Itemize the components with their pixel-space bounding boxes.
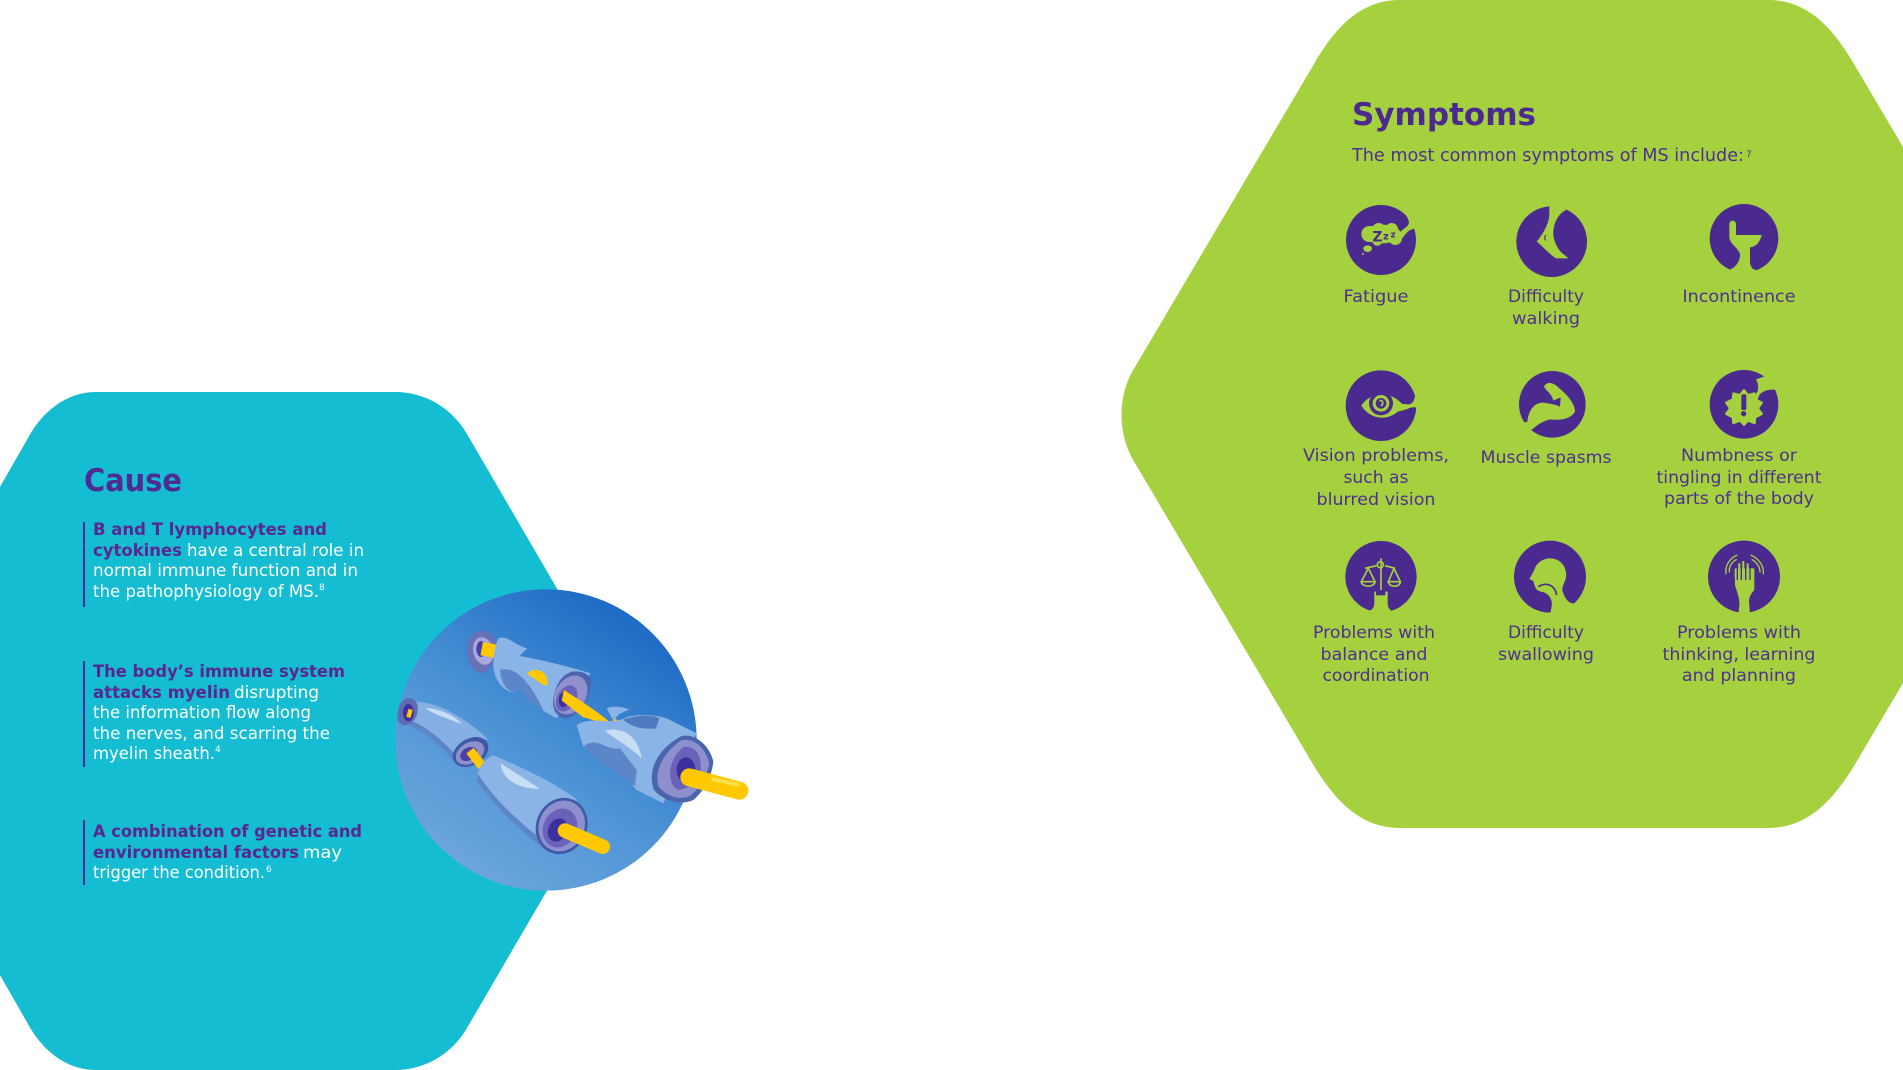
label: vision problems: blurred vision bbox=[1316, 490, 1436, 509]
icon: swallowing bbox=[1514, 541, 1586, 615]
icon: fatigue bbox=[1346, 205, 1423, 275]
text block: genetic factors: environmental factors bbox=[93, 843, 299, 862]
icon: thinking bbox=[1708, 541, 1780, 615]
label: balance bbox=[1313, 623, 1435, 685]
text block: immune system bbox=[83, 661, 345, 767]
label: muscle spasms: Muscle spasms bbox=[1480, 448, 1612, 467]
icon: balance bbox=[1345, 541, 1417, 618]
label: thinking bbox=[1662, 623, 1816, 685]
small upper cap bbox=[467, 631, 496, 673]
label: vision problems bbox=[1303, 446, 1449, 509]
text block: genetic factors: 6 bbox=[266, 865, 272, 875]
tube A bbox=[408, 702, 487, 765]
text block: lymphocytes: cytokines bbox=[93, 541, 182, 560]
heading: cause: Cause bbox=[84, 463, 182, 499]
panel: symptoms hexagon bbox=[1122, 0, 1903, 828]
icon: vision bbox=[1346, 370, 1422, 441]
label: numbness: tingling in different bbox=[1656, 468, 1822, 487]
label: balance: Problems with bbox=[1313, 623, 1435, 642]
text block: lymphocytes: the pathophysiology of MS. bbox=[93, 582, 319, 601]
label: thinking: thinking, learning bbox=[1662, 645, 1816, 664]
label: difficulty walking: walking bbox=[1512, 309, 1580, 328]
heading: symptoms: Symptoms bbox=[1352, 97, 1536, 133]
tube B bbox=[476, 755, 577, 854]
text block: lymphocytes: B and T lymphocytes and bbox=[93, 520, 327, 539]
label: thinking: and planning bbox=[1682, 666, 1796, 685]
text block: lymphocytes: normal immune function and in bbox=[93, 561, 358, 580]
icon: walking bbox=[1516, 203, 1587, 277]
label: difficulty walking: Difficulty bbox=[1508, 287, 1584, 306]
text block: genetic factors: trigger the condition. bbox=[93, 863, 265, 882]
label: vision problems: Vision problems, bbox=[1303, 446, 1449, 465]
label: vision problems: such as bbox=[1344, 468, 1408, 487]
label: thinking: Problems with bbox=[1677, 623, 1801, 642]
subtitle: The most common symptoms of MS include: bbox=[1351, 146, 1744, 166]
label: balance: coordination bbox=[1322, 666, 1430, 685]
cap of tube A bbox=[448, 731, 494, 773]
icon: numbness bbox=[1710, 370, 1779, 439]
label: incontinence: Incontinence bbox=[1682, 287, 1796, 306]
text block: lymphocytes: have a central role in bbox=[187, 541, 364, 560]
icon: fatigue: Z bbox=[1372, 229, 1382, 245]
illustration: damaged nerve fibres bbox=[393, 589, 739, 891]
label: difficulty swallowing: swallowing bbox=[1498, 645, 1594, 664]
label: fatigue: Fatigue bbox=[1344, 287, 1408, 306]
label: balance: balance and bbox=[1320, 645, 1428, 664]
text block: immune system: 4 bbox=[215, 745, 221, 755]
icon: muscle bbox=[1517, 371, 1586, 440]
text block: immune system: disrupting bbox=[234, 683, 319, 702]
icon: fatigue: z bbox=[1391, 231, 1396, 241]
subtitle: 7 bbox=[1746, 150, 1752, 160]
panel: cause hexagon bbox=[0, 392, 640, 1070]
text block: immune system: the information flow along bbox=[93, 703, 311, 722]
text block: immune system: attacks myelin bbox=[93, 683, 230, 702]
label: numbness: Numbness or bbox=[1681, 446, 1797, 465]
text block: lymphocytes: 8 bbox=[319, 583, 325, 593]
label: numbness bbox=[1656, 446, 1822, 508]
torn tube bbox=[493, 638, 591, 718]
text block: immune system: the nerves, and scarring the bbox=[93, 724, 330, 743]
big torn tube bbox=[577, 715, 697, 803]
text block: genetic factors: may bbox=[303, 843, 342, 862]
text block: immune system: myelin sheath. bbox=[93, 744, 215, 763]
label: numbness: parts of the body bbox=[1664, 489, 1814, 508]
text block: genetic factors: A combination of genetic and bbox=[93, 822, 362, 841]
text block: lymphocytes bbox=[83, 520, 364, 607]
text block: genetic factors bbox=[83, 820, 362, 885]
label: difficulty swallowing: Difficulty bbox=[1508, 623, 1584, 642]
icon: fatigue: z bbox=[1383, 231, 1389, 242]
label: difficulty walking bbox=[1508, 287, 1584, 328]
text block: immune system: The body’s immune system bbox=[93, 662, 345, 681]
icon: incontinence bbox=[1710, 204, 1778, 280]
label: difficulty swallowing bbox=[1498, 623, 1594, 664]
